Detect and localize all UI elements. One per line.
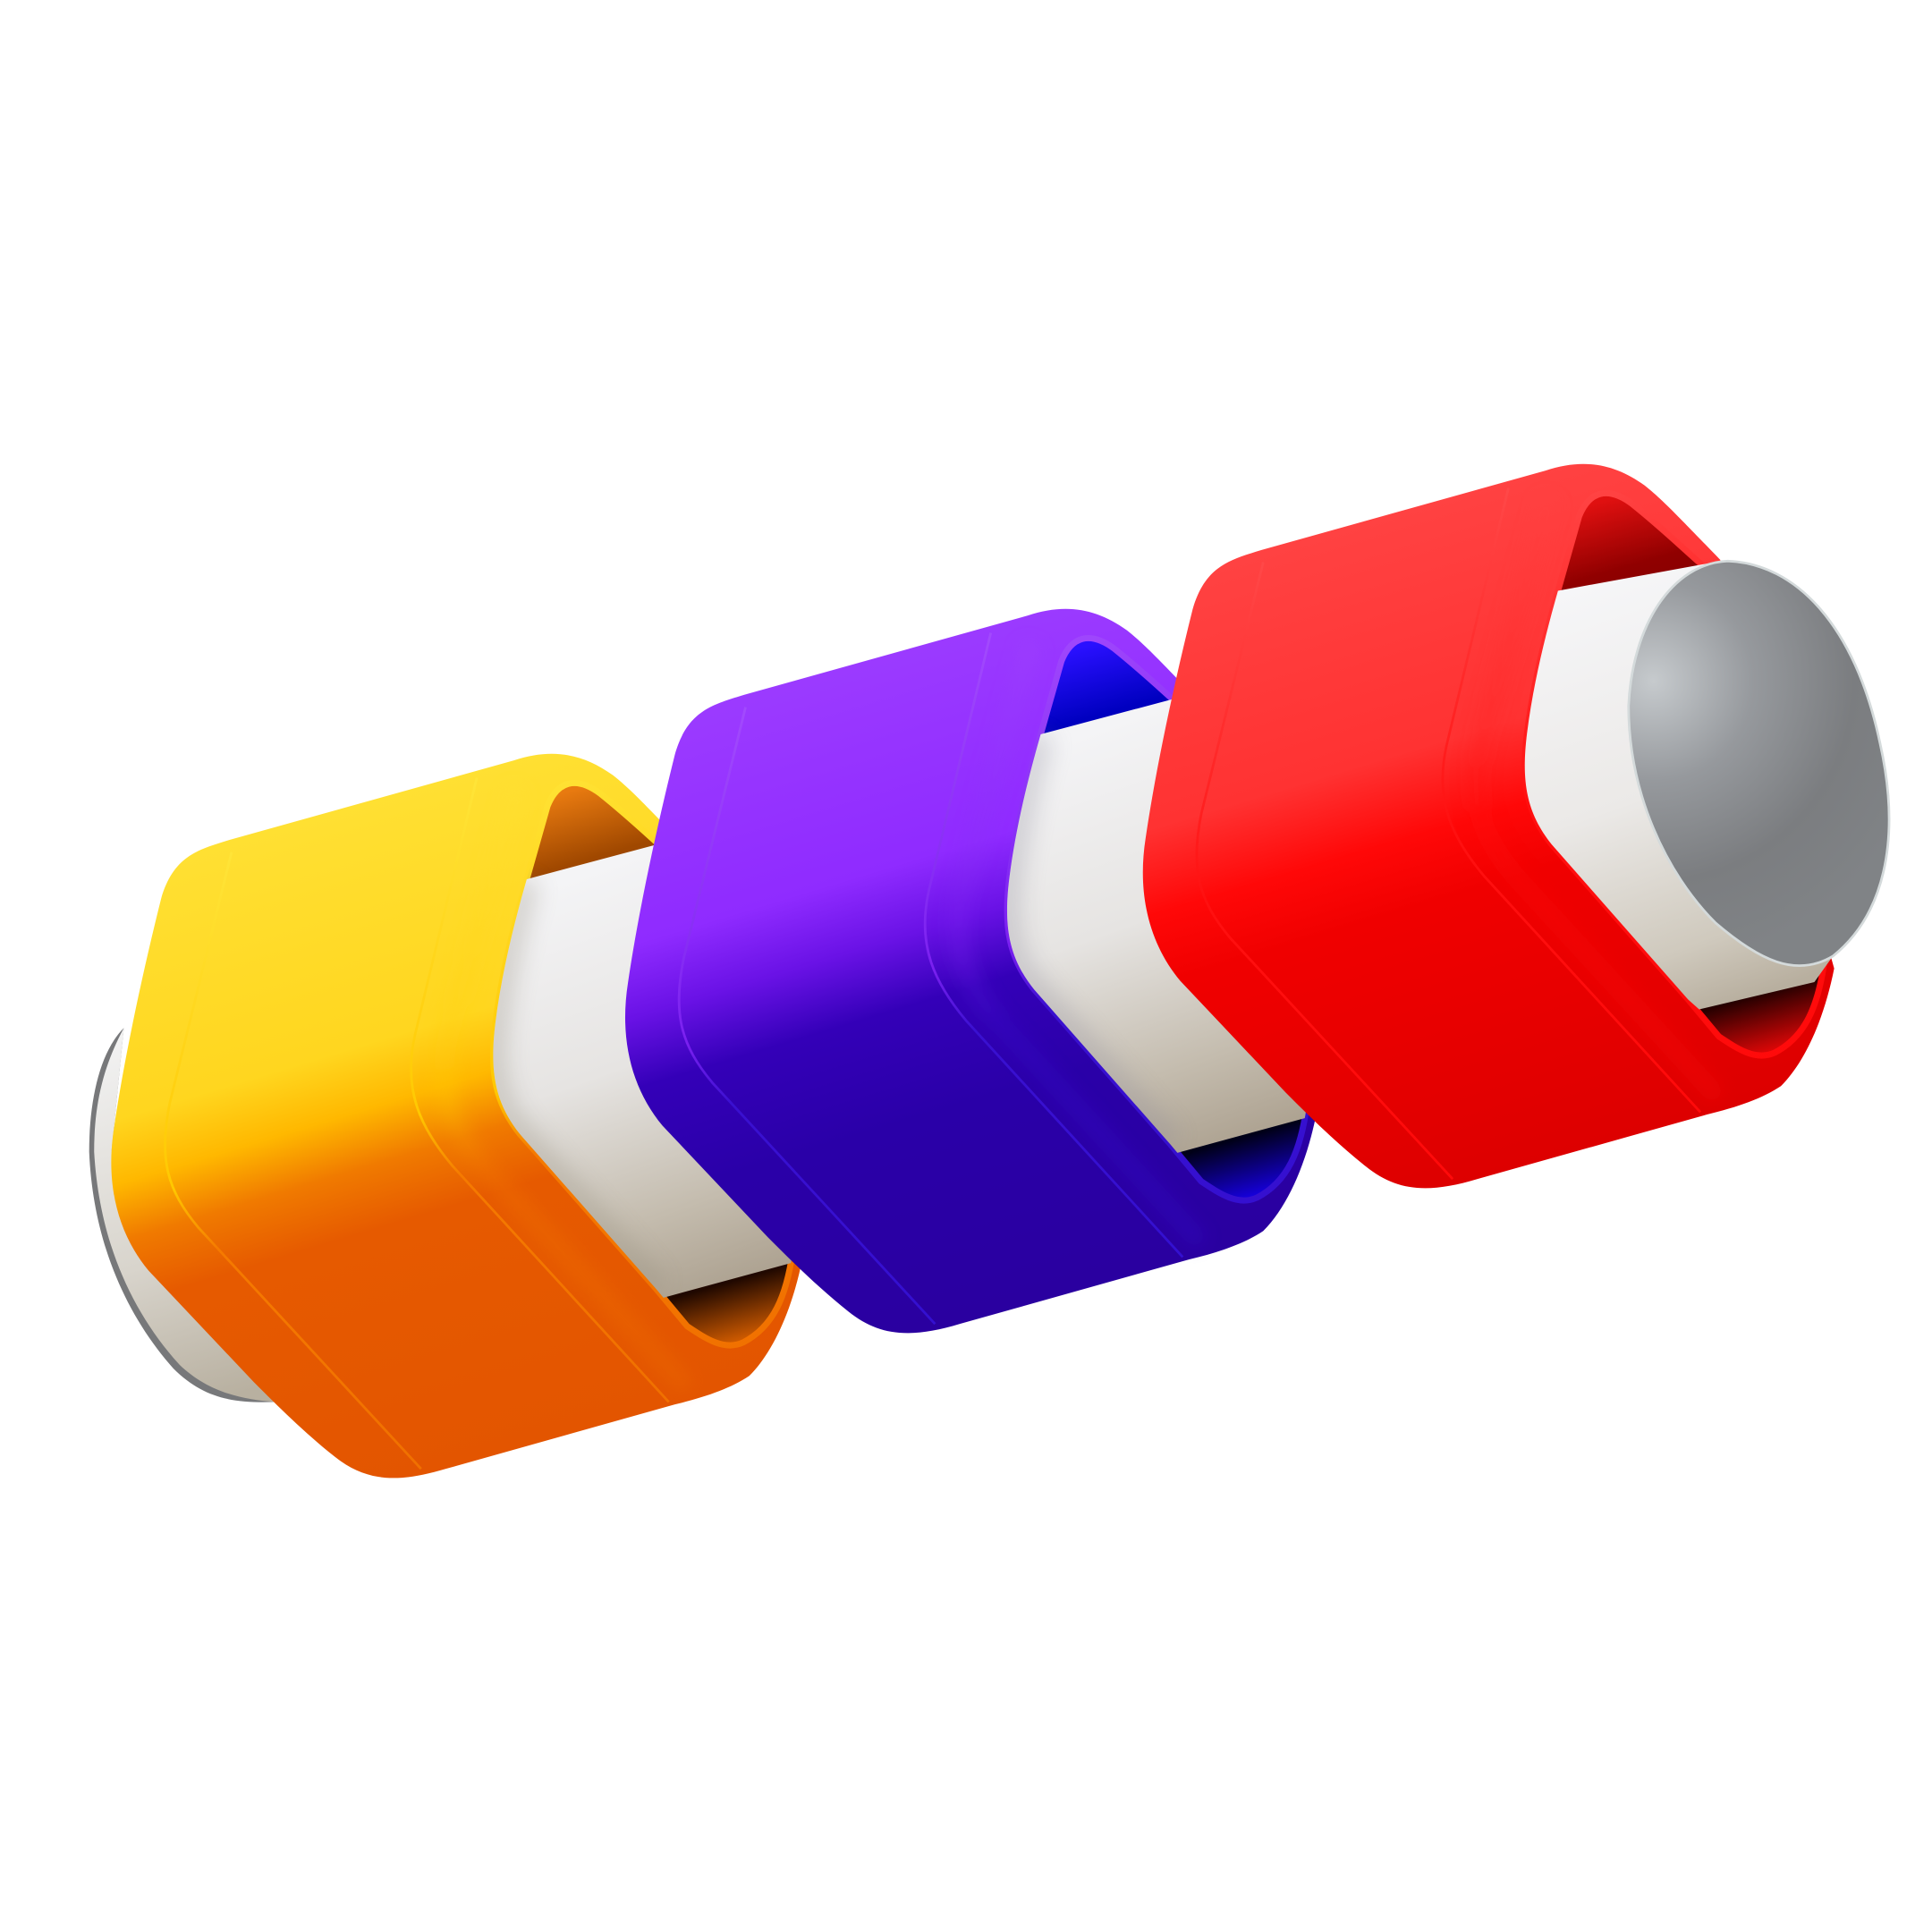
left rod end cap [89, 1028, 275, 1402]
block: purple [625, 609, 1331, 1333]
yellow block seams [165, 778, 669, 1469]
illustration: three coloured blocks on a white rod [89, 463, 1891, 1478]
purple block rim sheen [958, 643, 1201, 1243]
red block rim sheen [1476, 498, 1719, 1098]
yellow block body [111, 754, 802, 1478]
block: yellow and orange [111, 754, 818, 1478]
red block opening [1525, 493, 1825, 1055]
rod segment: yellow to purple [493, 845, 792, 1298]
red block body [1143, 464, 1835, 1188]
block: red [1143, 464, 1835, 1188]
yellow block opening [493, 783, 792, 1345]
yellow block rim sheen [445, 788, 687, 1388]
purple block opening [1007, 638, 1307, 1200]
rod end: white cylinder [1525, 560, 1833, 1009]
rod segment: purple to red [1007, 699, 1306, 1153]
purple block seams [679, 633, 1182, 1324]
grey cap [1629, 561, 1889, 966]
red block seams [1197, 488, 1700, 1179]
purple block body [625, 609, 1317, 1333]
rod end with grey cap [1525, 560, 1889, 1009]
